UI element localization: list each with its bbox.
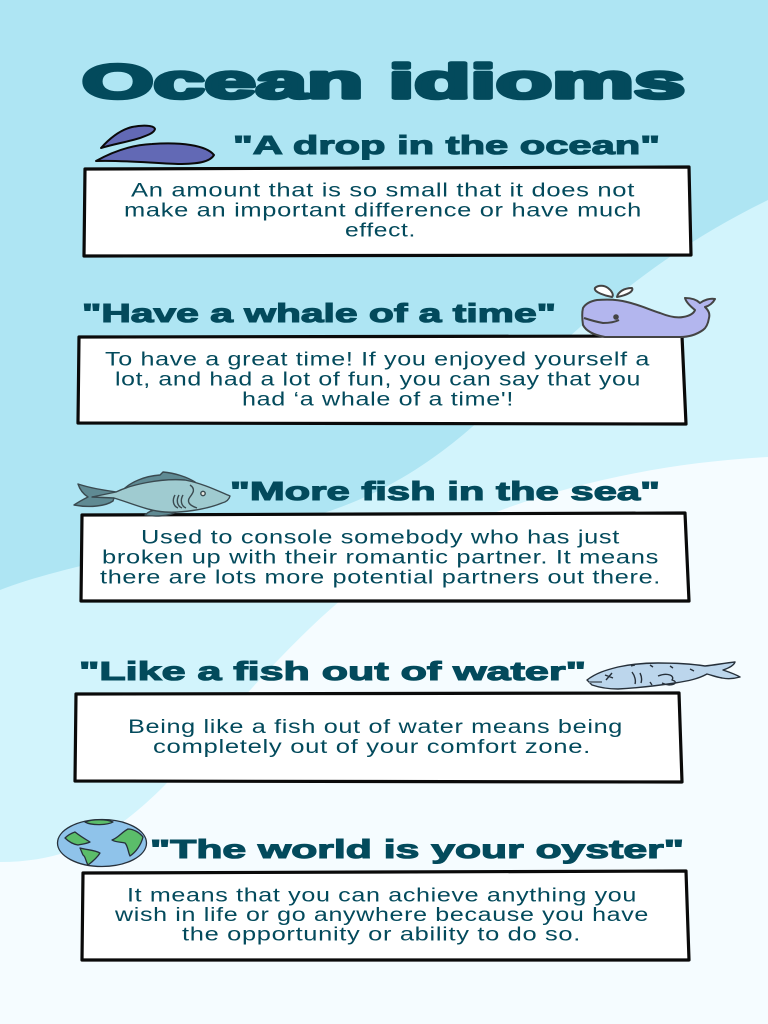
description: make an important difference or have much bbox=[124, 200, 642, 222]
panel: a drop in the ocean bbox=[84, 126, 691, 256]
description: broken up with their romantic partner. It means bbox=[102, 548, 659, 568]
description: An amount that is so small that it does not bbox=[131, 180, 635, 202]
description bbox=[100, 528, 661, 588]
description bbox=[128, 717, 623, 758]
icon: globe bbox=[58, 820, 146, 866]
description bbox=[105, 350, 650, 410]
text box bbox=[78, 336, 686, 424]
description: Being like a fish out of water means being bbox=[128, 717, 623, 738]
panel: the world is your oyster bbox=[58, 820, 689, 960]
heading: "A drop in the ocean" bbox=[233, 130, 660, 160]
icon: water drops bbox=[96, 126, 214, 164]
background: lightest wave bbox=[0, 457, 768, 1024]
description: the opportunity or ability to do so. bbox=[182, 924, 581, 946]
description: wish in life or go anywhere because you have bbox=[114, 905, 649, 926]
text box bbox=[84, 167, 691, 256]
icon: fish bbox=[74, 472, 230, 516]
description: lot, and had a lot of fun, you can say that you bbox=[115, 370, 641, 390]
heading: "Have a whale of a time" bbox=[82, 298, 556, 328]
description: Used to console somebody who has just bbox=[141, 528, 620, 548]
description: had ‘a whale of a time'! bbox=[242, 390, 514, 410]
description: completely out of your comfort zone. bbox=[153, 737, 591, 758]
text box bbox=[81, 513, 689, 601]
title: Ocean idioms bbox=[82, 56, 685, 109]
panel: have a whale of a time bbox=[78, 286, 715, 424]
description: It means that you can achieve anything you bbox=[127, 886, 637, 906]
panel: like a fish out of water bbox=[75, 656, 740, 782]
heading: "More fish in the sea" bbox=[230, 476, 660, 506]
heading: "Like a fish out of water" bbox=[79, 656, 586, 686]
icon: fish out of water bbox=[587, 662, 740, 689]
heading: "The world is your oyster" bbox=[150, 834, 684, 864]
text box bbox=[82, 871, 689, 960]
description: effect. bbox=[345, 220, 416, 242]
description: To have a great time! If you enjoyed yourself a bbox=[105, 350, 650, 370]
description bbox=[114, 886, 649, 946]
text box bbox=[75, 693, 682, 782]
panel: more fish in the sea bbox=[74, 472, 689, 601]
description bbox=[124, 180, 642, 242]
description: there are lots more potential partners out there. bbox=[100, 568, 661, 588]
icon: whale bbox=[582, 286, 715, 337]
